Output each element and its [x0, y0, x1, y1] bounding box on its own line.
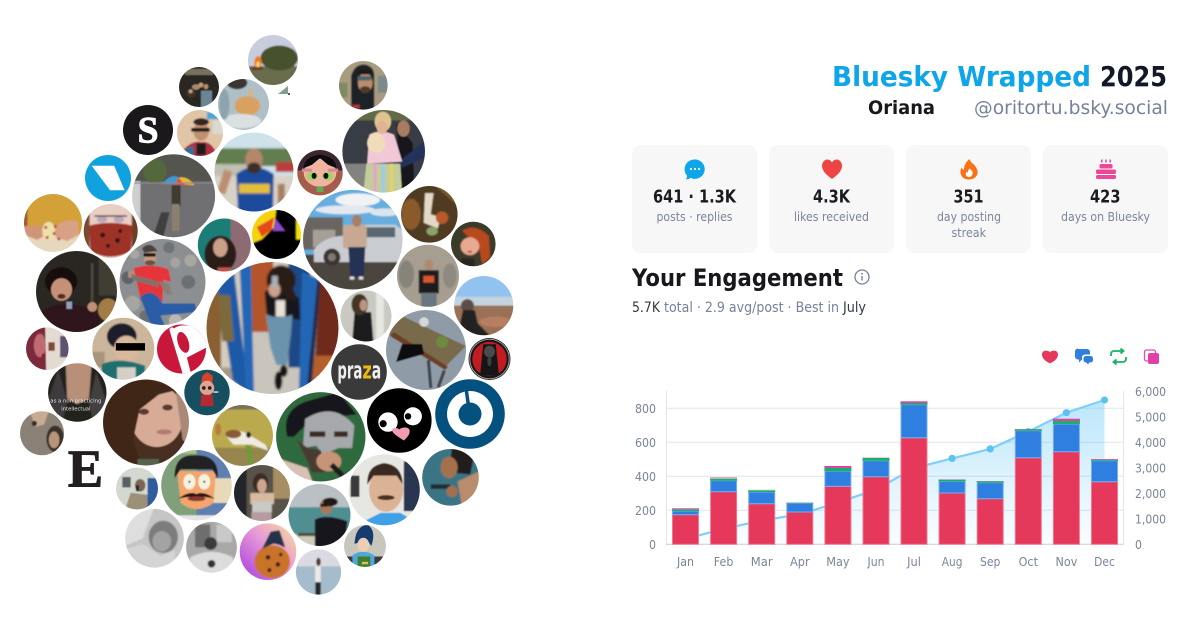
- icon: heart: [822, 160, 842, 179]
- month labels: Dec: [1094, 555, 1115, 569]
- avatar: woman with necklace and caption: [45, 360, 109, 425]
- user name: Oriana: [868, 97, 935, 119]
- engagement chart: [635, 385, 1166, 569]
- month labels: Oct: [1019, 555, 1038, 569]
- left axis labels: 800: [635, 402, 656, 416]
- cumulative points: [948, 396, 1108, 462]
- stacked bars: reposts: [672, 403, 1118, 511]
- month labels: Jan: [676, 555, 694, 569]
- chart legend: [1042, 348, 1159, 364]
- title: Bluesky Wrapped: [832, 60, 1091, 93]
- avatar: praza logo: pra: [337, 356, 362, 384]
- left axis labels: [635, 402, 656, 552]
- avatar: man between deer statues: [397, 244, 459, 307]
- icon: speech bubble: [685, 159, 705, 179]
- right axis labels: 4,000: [1135, 436, 1166, 450]
- right axis labels: 1,000: [1135, 512, 1166, 526]
- month labels: Jul: [906, 555, 921, 569]
- avatar: E logo: [50, 434, 121, 504]
- avatar: woman with umbrella: [132, 154, 216, 238]
- avatar: woman on train: [114, 465, 160, 512]
- month labels: Feb: [714, 555, 733, 569]
- avatar: man by the sea: [288, 484, 350, 546]
- right axis labels: 3,000: [1135, 462, 1166, 476]
- month labels: [676, 555, 1115, 569]
- avatar: hand with red nails: [24, 325, 71, 372]
- avatar: woman with necklace and caption: as a non practicing: [50, 399, 102, 405]
- avatar: group photo: [179, 67, 219, 107]
- stat value: 4.3K: [813, 186, 851, 208]
- grid lines: [666, 391, 1124, 544]
- avatar: Bob's Burgers: [161, 450, 232, 520]
- cumulative line: [686, 400, 1104, 539]
- icon: cake: [1096, 160, 1116, 179]
- stat label: days on Bluesky: [1061, 209, 1151, 224]
- month labels: Aug: [942, 555, 962, 569]
- avatar: laughing child: [36, 251, 117, 332]
- avatar: seaside skyline: [454, 276, 514, 336]
- avatar: masked rapper: [276, 392, 366, 482]
- right axis labels: [1135, 385, 1166, 552]
- avatar: woman under teal cloth: [198, 218, 251, 272]
- stat value: 351: [954, 186, 984, 208]
- month labels: May: [826, 555, 850, 569]
- avatar: woman in black dress: [340, 290, 392, 342]
- avatar: sleeping figure: [18, 409, 66, 458]
- avatar: cookie illustration: [240, 523, 296, 580]
- avatar: black creature with eyes: [367, 388, 432, 453]
- month labels: Nov: [1056, 555, 1077, 569]
- engagement summary: July: [842, 300, 866, 316]
- avatar: woman in white top: [234, 465, 290, 521]
- heading: your engagement: Your Engagement: [631, 264, 843, 292]
- legend icon: replies: [1075, 348, 1093, 364]
- icon: flame: [960, 159, 978, 180]
- stacked bars: replies: [672, 405, 1118, 515]
- avatar: Renaissance painting: [401, 186, 458, 243]
- avatar: black and white man from behind: [184, 519, 239, 575]
- avatar: P logo: [155, 322, 208, 376]
- avatar: orange cat: [218, 79, 269, 130]
- right axis labels: 0: [1135, 538, 1142, 552]
- month labels: Mar: [751, 555, 773, 569]
- avatar: woman in red mask: [84, 204, 138, 258]
- engagement summary: 5.7K: [632, 300, 661, 316]
- avatar: cat in flowers: [212, 405, 273, 466]
- avatar: wheelbarrow and black cat: [386, 310, 466, 390]
- stat value: 641 · 1.3K: [653, 186, 737, 208]
- stat label second line: streak: [952, 225, 987, 240]
- avatar: cartoon woman with blue hair: [344, 525, 386, 567]
- stat label: day posting: [937, 209, 1001, 224]
- small broken image marker: [278, 86, 290, 95]
- avatar: blonde woman with fan: [342, 110, 425, 193]
- stat value: 423: [1090, 186, 1120, 208]
- icon: info: [855, 270, 869, 284]
- stacked bars: quotes: [672, 401, 1118, 509]
- avatar: hands with cup: [24, 194, 82, 252]
- month labels: Jun: [867, 555, 884, 569]
- avatar: blue logo: [85, 155, 131, 201]
- legend icon: likes: [1042, 351, 1058, 363]
- stat label: likes received: [794, 209, 869, 224]
- month labels: Apr: [790, 555, 810, 569]
- avatar: man with moustache selfie: [348, 454, 420, 526]
- avatar: person looking at sea: [296, 550, 342, 595]
- avatar: E logo: E: [68, 441, 103, 499]
- user handle: @oritortu.bsky.social: [974, 97, 1168, 119]
- avatar: painting of woman with gun: [422, 449, 479, 506]
- left axis labels: 200: [635, 504, 656, 518]
- panel: posts and replies: [632, 145, 757, 253]
- left axis labels: 400: [635, 470, 656, 484]
- avatar: mirror selfie woman (large): [206, 262, 338, 394]
- cumulative area: [686, 400, 1104, 544]
- avatar: praza logo: a: [372, 356, 381, 384]
- title: 2025: [1100, 60, 1167, 93]
- right axis labels: 5,000: [1135, 410, 1166, 424]
- avatar: praza logo: [331, 344, 387, 400]
- avatar: Buttercup cartoon: [297, 150, 343, 196]
- avatar: red-haired woman: [451, 222, 496, 266]
- legend icon: reposts: [1111, 348, 1126, 364]
- avatar: bonfire: [248, 35, 298, 85]
- avatar: man in Boca shirt: [214, 132, 294, 212]
- legend icon: quotes: [1144, 350, 1159, 364]
- panel: posting streak: [906, 145, 1031, 253]
- avatar: man in hoodie: [339, 61, 388, 110]
- avatar: praza logo: z: [362, 356, 372, 384]
- panel: days on Bluesky: [1043, 145, 1168, 253]
- avatar cluster: [18, 32, 516, 597]
- stacked bars: likes: [672, 438, 1118, 544]
- avatar: woman beside white car: [303, 190, 403, 290]
- right axis labels: 2,000: [1135, 487, 1166, 501]
- left axis labels: 600: [635, 436, 656, 450]
- avatar: woman with necklace and caption: intellectual: [61, 406, 91, 412]
- avatar: man with sunglasses: [177, 110, 223, 156]
- avatar: man in red shirt: [120, 239, 206, 325]
- avatar: S logo: [123, 105, 173, 155]
- avatar: woman close-up: [99, 375, 193, 470]
- engagement summary: total · 2.9 avg/post · Best in: [664, 300, 839, 316]
- right axis labels: 6,000: [1135, 385, 1166, 399]
- stat label: posts · replies: [656, 209, 732, 224]
- avatar: child with censored eyes: [89, 315, 157, 383]
- avatar: black and white woman: [122, 506, 187, 571]
- avatar: blue ring logo: [435, 379, 505, 449]
- avatar: punk cartoon on teal: [182, 368, 232, 417]
- month labels: Sep: [980, 555, 1000, 569]
- avatar: thermal silhouette: [252, 210, 301, 259]
- avatar: S logo: S: [138, 110, 158, 152]
- left axis labels: 0: [649, 538, 656, 552]
- panel: likes received: [769, 145, 894, 253]
- avatar: gas mask figure: [468, 338, 510, 380]
